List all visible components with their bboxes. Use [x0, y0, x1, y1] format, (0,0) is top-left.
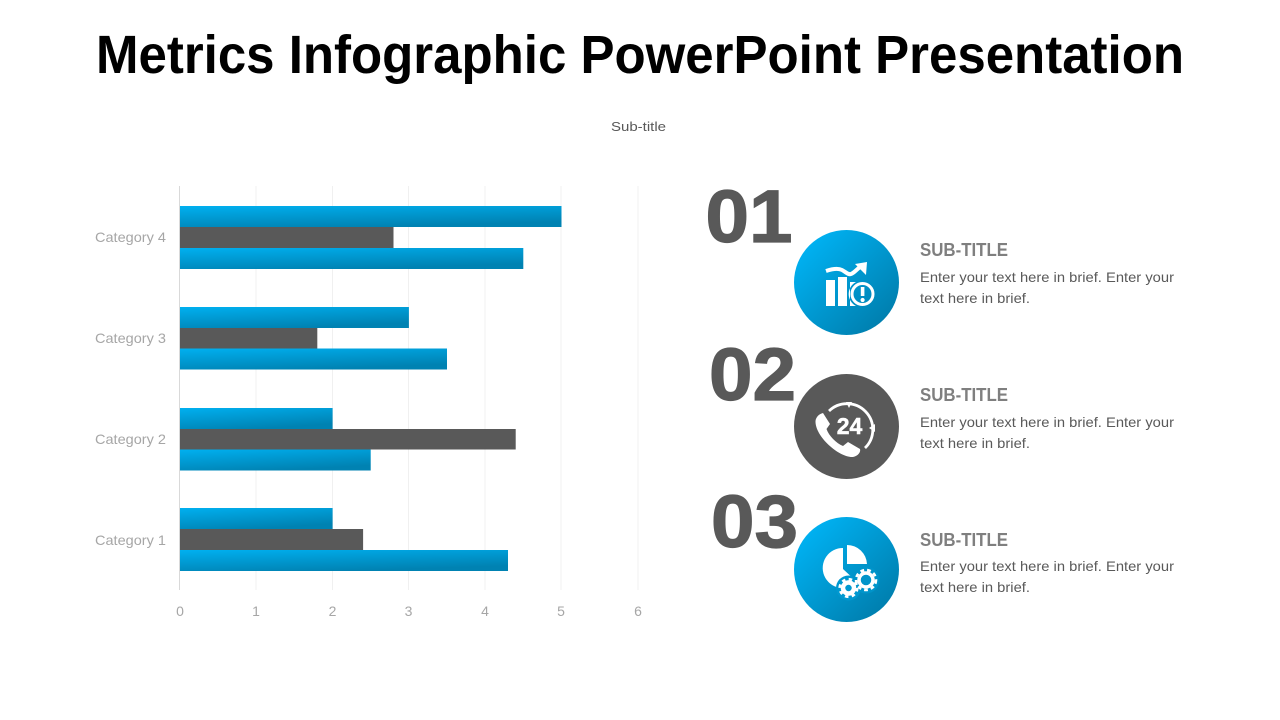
value axis labels	[176, 603, 642, 619]
bars: category 3	[180, 307, 447, 370]
bars: category 4	[180, 206, 562, 269]
value axis labels: 1	[252, 603, 260, 619]
text block 2: text here in brief.	[920, 435, 1030, 451]
circle 3 with pie and gears icon	[794, 517, 899, 622]
value axis labels: 3	[405, 603, 413, 619]
category labels: Category 3	[95, 330, 166, 346]
bars: category 1	[180, 508, 508, 571]
category labels	[95, 229, 166, 548]
number 03: 03	[711, 480, 798, 563]
value axis labels: 2	[329, 603, 337, 619]
text block 1	[920, 240, 1174, 306]
text block 3: text here in brief.	[920, 579, 1030, 595]
value axis labels: 5	[557, 603, 565, 619]
text block 2: Enter your text here in brief. Enter your	[920, 414, 1174, 430]
subtitle: Sub-title	[611, 119, 666, 134]
text block 3	[920, 530, 1174, 595]
title: Metrics Infographic PowerPoint Presentation	[96, 25, 1184, 85]
icon: 24 hour phone: 24	[837, 413, 862, 439]
icon: pie chart and gears	[823, 545, 880, 600]
text block 1: Enter your text here in brief. Enter your	[920, 269, 1174, 285]
circle 2 with 24 hour phone icon	[794, 374, 899, 479]
value axis labels: 4	[481, 603, 489, 619]
icon: bars with trend arrow and alert	[826, 262, 873, 306]
text block 2	[920, 385, 1174, 451]
text block 3: SUB-TITLE	[920, 530, 1008, 550]
text block 3: Enter your text here in brief. Enter your	[920, 558, 1174, 574]
bars: category 2	[180, 408, 516, 470]
value axis labels: 6	[634, 603, 642, 619]
text block 1: SUB-TITLE	[920, 240, 1008, 260]
category labels: Category 2	[95, 431, 166, 447]
category labels: Category 1	[95, 532, 166, 548]
number 02: 02	[709, 333, 796, 416]
bar chart	[95, 186, 642, 619]
text block 1: text here in brief.	[920, 290, 1030, 306]
category labels: Category 4	[95, 229, 166, 245]
value axis labels: 0	[176, 603, 184, 619]
circle 1 with metrics alert icon	[794, 230, 899, 335]
text block 2: SUB-TITLE	[920, 385, 1008, 405]
number 01: 01	[706, 175, 792, 258]
